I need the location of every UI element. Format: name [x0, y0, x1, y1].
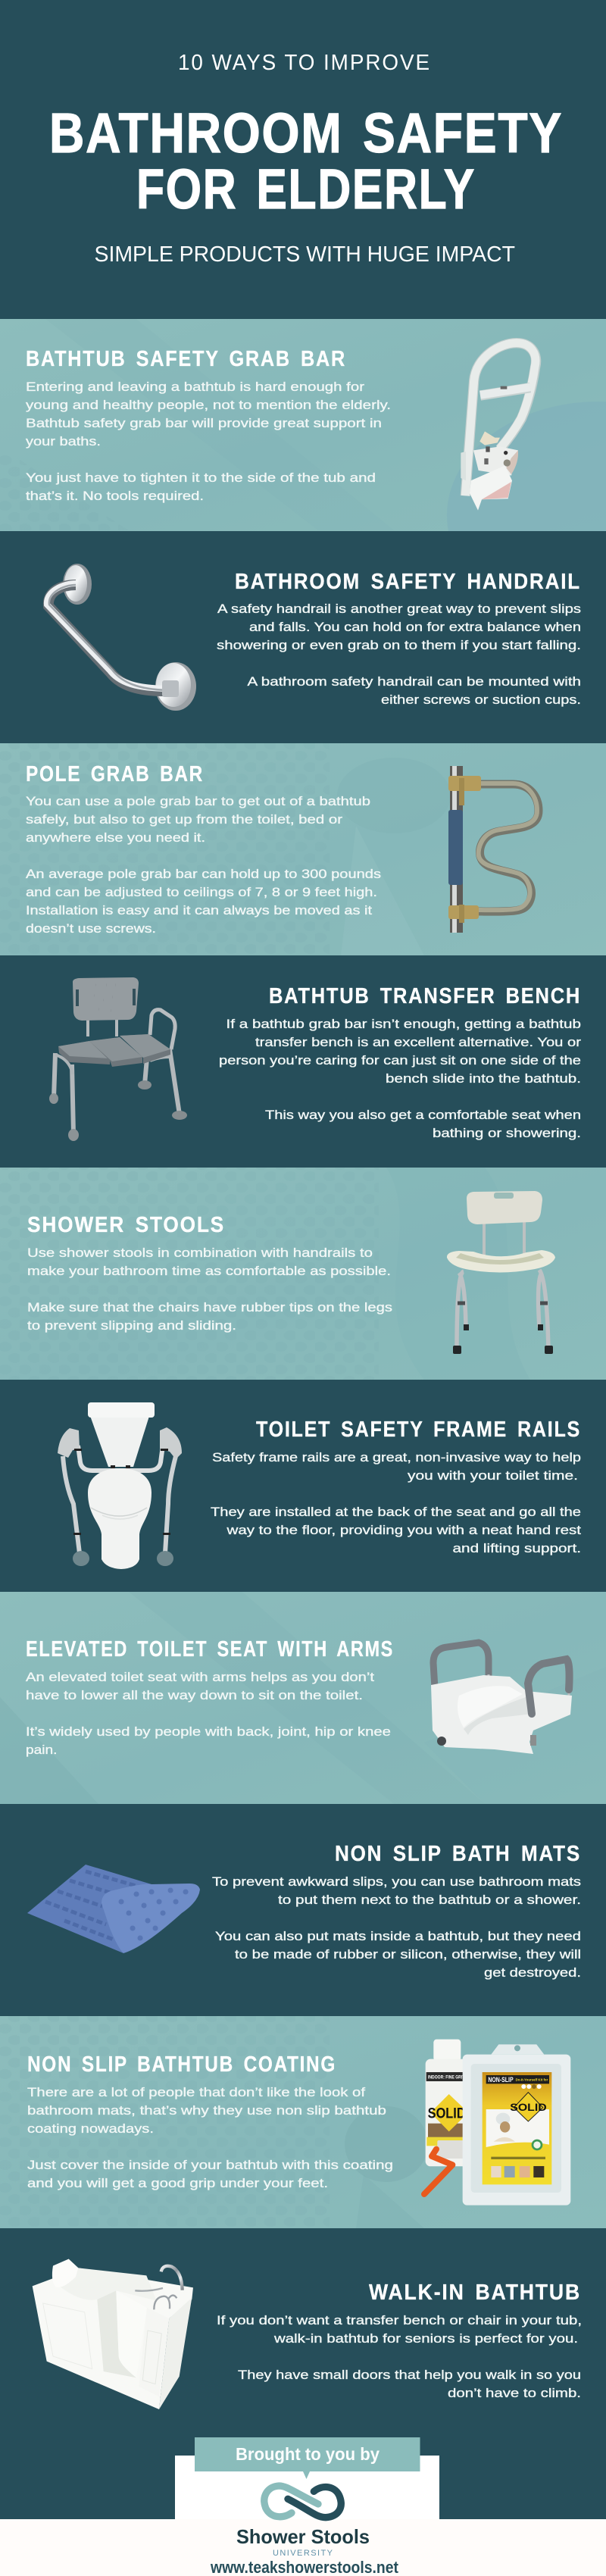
body text [217, 2314, 582, 2400]
body text: An average pole grab bar can hold up to 300 pounds [26, 868, 381, 881]
blister pack: Do-It-Yourself Kit for [516, 2078, 548, 2082]
panel: shower stools [0, 1168, 606, 1380]
panel: bathtub safety grab bar [0, 319, 606, 629]
body text: Just cover the inside of your bathtub with this coating [27, 2159, 393, 2172]
panel: non slip bathtub coating [0, 2016, 606, 2228]
panel: bathroom safety handrail [0, 531, 606, 743]
callout banner [195, 2437, 420, 2479]
heading: POLE GRAB BAR [26, 762, 204, 786]
body text: They have small doors that help you walk in so you [238, 2368, 581, 2382]
body text: To prevent awkward slips, you can use bathroom mats [212, 1875, 581, 1889]
icon: transfer bench [49, 977, 187, 1141]
body text: You can also put mats inside a bathtub, but they need [215, 1930, 581, 1943]
body text: showering or even grab on to them if you start falling. [217, 639, 581, 652]
panel: bathtub transfer bench [0, 955, 606, 1168]
title [49, 102, 563, 220]
logo subline: UNIVERSITY [273, 2549, 333, 2558]
logo wordmark: Shower Stools [236, 2525, 370, 2548]
body text: Safety frame rails are a great, non-invasive way to help [212, 1451, 581, 1465]
body text: to prevent slipping and sliding. [27, 1319, 236, 1333]
icon: blue non slip mat [27, 1865, 200, 1953]
heading: NON SLIP BATH MATS [335, 1842, 581, 1866]
callout banner: Brought to you by [236, 2444, 380, 2464]
body text: A bathroom safety handrail can be mounted with [247, 675, 581, 689]
body text: transfer bench is an excellent alternative. You or [255, 1036, 582, 1049]
body text [27, 2086, 393, 2190]
heading: SHOWER STOOLS [27, 1213, 225, 1237]
icon: toilet with frame rails [58, 1402, 182, 1569]
body text: and you will get a good grip under your feet. [27, 2177, 328, 2190]
body text: A safety handrail is another great way to prevent slips [217, 602, 581, 616]
body text: bench slide into the bathtub. [386, 1072, 581, 1086]
panel: walk-in bathtub [0, 2228, 606, 2519]
body text: young and healthy people, not to mention the elderly. [26, 399, 391, 412]
title: FOR ELDERLY [136, 158, 476, 220]
body text: Entering and leaving a bathtub is hard enough for [26, 380, 365, 394]
body text: way to the floor, providing you with a neat hand rest [226, 1524, 582, 1537]
subtitle: SIMPLE PRODUCTS WITH HUGE IMPACT [94, 242, 515, 267]
heading: WALK-IN BATHTUB [369, 2281, 581, 2305]
body text: You just have to tighten it to the side of the tub and [26, 471, 376, 485]
body text: person you’re caring for can just sit on one side of the [219, 1054, 581, 1068]
body text: Make sure that the chairs have rubber tips on the legs [27, 1301, 392, 1315]
body text: It’s widely used by people with back, joint, hip or knee [26, 1725, 391, 1739]
body text: and lifting support. [453, 1542, 581, 1555]
body text: If you don’t want a transfer bench or chair in your tub, [217, 2314, 582, 2327]
body text: to put them next to the bathtub or a shower. [278, 1893, 581, 1907]
bottle: INDOOR: FINE GRIT [428, 2074, 464, 2080]
body text: bathing or showering. [433, 1127, 581, 1140]
heading: BATHTUB SAFETY GRAB BAR [26, 347, 346, 371]
body text: to be made of rubber or silicon, otherwise, they will [235, 1948, 581, 1962]
footer panel: brought to you by [0, 2437, 606, 2576]
body text [26, 1671, 391, 1757]
body text: anywhere else you need it. [26, 831, 205, 845]
panel: toilet safety frame rails [0, 1380, 606, 1592]
blister pack [463, 2044, 570, 2206]
body text [27, 1246, 392, 1333]
kicker: 10 ways to improve: 10 WAYS TO IMPROVE [178, 51, 431, 75]
body text: This way you also get a comfortable seat when [265, 1108, 581, 1122]
body text: pain. [26, 1743, 58, 1757]
body text: Installation is easy and it can always be moved as it [26, 904, 372, 918]
body text: bathroom mats, that’s why they use non slip bathtub [27, 2104, 386, 2118]
icon: tub grab bar [461, 343, 536, 511]
icon: shower chair [447, 1191, 555, 1354]
body text: Use shower stools in combination with handrails to [27, 1246, 373, 1260]
body text: either screws or suction cups. [381, 693, 581, 707]
body text [211, 1451, 582, 1555]
body text: Bathtub safety grab bar will provide great support in [26, 417, 382, 430]
body text: and falls. You can hold on for extra balance when [249, 621, 581, 634]
body text [26, 380, 391, 503]
blister pack: NON-SLIP [488, 2076, 514, 2084]
header panel [0, 0, 606, 319]
body text: If a bathtub grab bar isn’t enough, getting a bathtub [226, 1018, 581, 1031]
heading: NON SLIP BATHTUB COATING [27, 2052, 336, 2077]
body text [26, 795, 381, 936]
body text [219, 1018, 582, 1140]
body text: You can use a pole grab bar to get out of a bathtub [26, 795, 370, 808]
logo mark [264, 2486, 341, 2518]
body text: you with your toilet time. [408, 1469, 578, 1483]
body text: and can be adjusted to ceilings of 7, 8 or 9 feet high. [26, 886, 377, 899]
body text: There are a lot of people that don’t like the look of [27, 2086, 365, 2099]
icon: coating kit [424, 2040, 570, 2206]
body text [217, 602, 581, 707]
body text: have to lower all the way down to sit on the toilet. [26, 1689, 363, 1702]
body text: don’t have to climb. [448, 2387, 581, 2400]
panel: elevated toilet seat with arms [0, 1592, 606, 1804]
icon: walk-in tub [33, 2259, 193, 2409]
icon: raised toilet seat [431, 1643, 572, 1754]
body text: doesn’t use screws. [26, 922, 156, 936]
body text: An elevated toilet seat with arms helps as you don’t [26, 1671, 374, 1684]
body text: your baths. [26, 435, 101, 449]
body text: walk-in bathtub for seniors is perfect for you. [273, 2332, 578, 2346]
body text: get destroyed. [484, 1966, 581, 1980]
roller [424, 2140, 465, 2194]
body text: They are installed at the back of the seat and go all the [211, 1505, 581, 1519]
body text: make your bathroom time as comfortable as possible. [27, 1265, 391, 1278]
icon: chrome handrail [47, 564, 196, 711]
blister pack: SOLID [510, 2101, 547, 2113]
panel: pole grab bar [0, 743, 606, 955]
body text [212, 1875, 581, 1980]
bottle [426, 2040, 468, 2166]
body text: safely, but also to get up from the toilet, bed or [26, 813, 343, 827]
heading: ELEVATED TOILET SEAT WITH ARMS [26, 1637, 394, 1662]
panel: non slip bath mats [0, 1804, 606, 2016]
body text: coating nowadays. [27, 2122, 154, 2136]
bottle: SOLID [428, 2106, 466, 2122]
icon: pole with curved grab bar [448, 766, 539, 933]
body text: that’s it. No tools required. [26, 489, 204, 503]
